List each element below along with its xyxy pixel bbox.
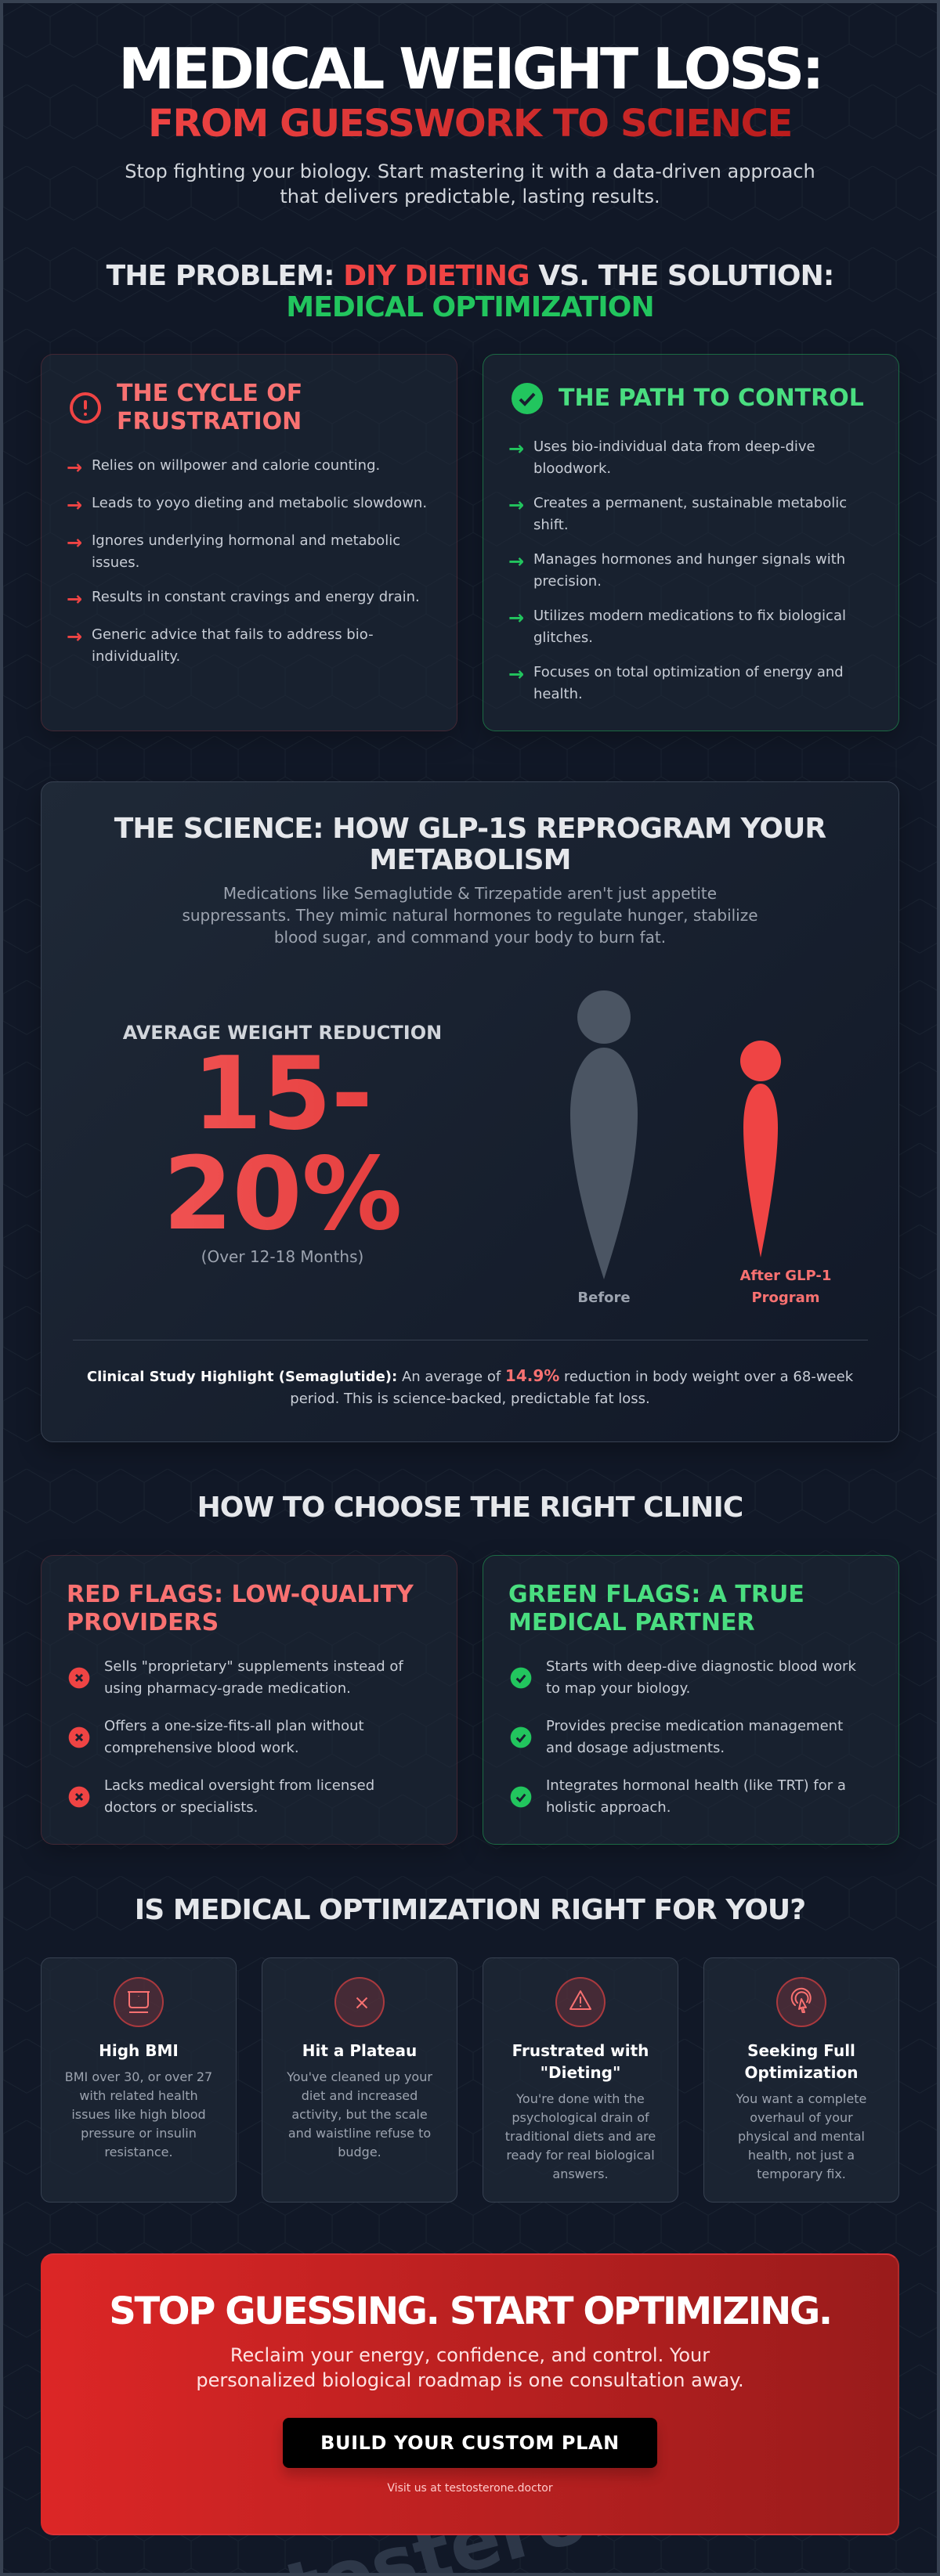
red flags list: using pharmacy-grade medication. <box>104 1680 351 1697</box>
control list: Focuses on total optimization of energy and <box>533 664 844 680</box>
control list: glitches. <box>533 630 593 646</box>
title: MEDICAL WEIGHT LOSS: <box>118 36 822 102</box>
frustration list: Leads to yoyo dieting and metabolic slowdown. <box>92 495 427 511</box>
control list <box>508 438 847 702</box>
frustration list: Results in constant cravings and energy drain. <box>92 589 420 605</box>
CTA heading: STOP GUESSING. START OPTIMIZING. <box>109 2289 831 2333</box>
control list: health. <box>533 686 583 702</box>
card title <box>745 2041 858 2082</box>
clinical study highlight: period. This is science-backed, predictable fat loss. <box>290 1391 650 1407</box>
after label: Program <box>751 1290 820 1306</box>
control list: Manages hormones and hunger signals with <box>533 551 845 568</box>
card text <box>505 2091 656 2181</box>
clinical study highlight: Clinical Study Highlight (Semaglutide): An average of 14.9% reduction in body weight over a 68-week <box>87 1366 853 1385</box>
before silhouette <box>570 990 638 1279</box>
card text: You're done with the <box>516 2091 645 2106</box>
clinical study highlight <box>87 1366 853 1407</box>
card text: overhaul of your <box>750 2110 853 2125</box>
frustration list: → <box>67 494 82 516</box>
red flags list: Sells "proprietary" supplements instead of <box>104 1658 403 1675</box>
frustration list: Ignores underlying hormonal and metabolic <box>92 532 400 549</box>
card text: temporary fix. <box>757 2167 846 2181</box>
call to action panel <box>41 2253 899 2535</box>
control list: bloodwork. <box>533 460 611 477</box>
red flags heading: RED FLAGS: LOW-QUALITY <box>67 1581 414 1608</box>
card text: resistance. <box>104 2145 173 2159</box>
science heading: METABOLISM <box>369 844 571 876</box>
heading: is it right for you: IS MEDICAL OPTIMIZATION RIGHT FOR YOU? <box>135 1894 805 1926</box>
green flags list: holistic approach. <box>546 1799 671 1816</box>
card text: health, not just a <box>748 2148 855 2163</box>
science heading <box>114 813 826 876</box>
CTA text <box>196 2344 744 2391</box>
frustration list: Generic advice that fails to address bio- <box>92 626 374 643</box>
frustration list: → <box>67 588 82 610</box>
statistic label: AVERAGE WEIGHT REDUCTION <box>123 1022 442 1044</box>
card title: Seeking Full <box>747 2041 855 2060</box>
panel: the path to control <box>483 354 899 731</box>
heading: problem vs solution: MEDICAL OPTIMIZATION <box>286 291 654 323</box>
red flags heading <box>67 1581 414 1636</box>
green flags list: and dosage adjustments. <box>546 1740 725 1756</box>
heading: problem vs solution <box>107 260 833 323</box>
panel: the cycle of frustration <box>41 354 457 731</box>
control list: Uses bio-individual data from deep-dive <box>533 438 815 455</box>
science heading: THE SCIENCE: HOW GLP-1S REPROGRAM YOUR <box>114 813 826 845</box>
card text: diet and increased <box>302 2088 418 2103</box>
red flags list <box>69 1658 404 1816</box>
CTA text: personalized biological roadmap is one consultation away. <box>196 2369 744 2391</box>
statistic value <box>163 1044 402 1245</box>
frustration list: issues. <box>92 554 139 571</box>
frustration list: → <box>67 532 82 554</box>
green flags list: Integrates hormonal health (like TRT) for a <box>546 1777 846 1794</box>
science description: Medications like Semaglutide & Tirzepatide aren't just appetite <box>223 884 717 903</box>
green flags heading: GREEN FLAGS: A TRUE <box>508 1581 804 1608</box>
tagline: that delivers predictable, lasting results. <box>280 186 660 207</box>
card text <box>65 2069 212 2159</box>
control list: → <box>508 438 524 460</box>
card text: with related health <box>79 2088 198 2103</box>
green flags heading: MEDICAL PARTNER <box>508 1609 755 1636</box>
statistic value: 15- <box>193 1036 372 1153</box>
control list: → <box>508 607 524 629</box>
card text: activity, but the scale <box>291 2107 428 2122</box>
card text <box>287 2069 432 2159</box>
science description: suppressants. They mimic natural hormones to regulate hunger, stabilize <box>182 906 758 925</box>
panel heading: THE CYCLE OF <box>117 380 302 407</box>
card text: and waistline refuse to <box>288 2126 431 2141</box>
card text: traditional diets and are <box>505 2129 656 2144</box>
control list: shift. <box>533 517 569 533</box>
green flags heading <box>508 1581 804 1636</box>
heading: problem vs solution: THE PROBLEM: DIY DIETING VS. THE SOLUTION: <box>107 260 833 292</box>
red flags heading: PROVIDERS <box>67 1609 219 1636</box>
after label: After GLP-1 <box>740 1268 831 1284</box>
card title: "Dieting" <box>540 2063 620 2082</box>
panel heading: THE PATH TO CONTROL <box>559 384 864 412</box>
red flags list: doctors or specialists. <box>104 1799 258 1816</box>
card title: High BMI <box>99 2041 179 2060</box>
green flags list <box>511 1658 856 1816</box>
website link: Visit us at testosterone.doctor <box>387 2482 553 2495</box>
icon: cross <box>334 1977 385 2027</box>
icon: warning triangle <box>555 1977 606 2027</box>
card text: issues like high blood <box>71 2107 206 2122</box>
panel: the science of GLP-1s <box>41 781 899 1442</box>
heading: choose clinic: HOW TO CHOOSE THE RIGHT CLINIC <box>197 1492 743 1524</box>
panel heading: FRUSTRATION <box>117 408 302 435</box>
panel: green flags <box>483 1555 899 1845</box>
before label: Before <box>577 1290 631 1306</box>
card: hit a plateau <box>262 1957 457 2203</box>
green flags list: Provides precise medication management <box>546 1718 843 1734</box>
frustration list: Relies on willpower and calorie counting. <box>92 457 380 474</box>
icon: cursor target <box>776 1977 826 2027</box>
frustration list: → <box>67 626 82 648</box>
control list: → <box>508 494 524 516</box>
card text <box>736 2091 866 2181</box>
red flags list: Offers a one-size-fits-all plan without <box>104 1718 364 1734</box>
card text: You've cleaned up your <box>287 2069 432 2084</box>
card text: answers. <box>552 2167 609 2181</box>
card text: BMI over 30, or over 27 <box>65 2069 212 2084</box>
card text: You want a complete <box>736 2091 866 2106</box>
statistic note: (Over 12-18 Months) <box>201 1247 363 1266</box>
card: frustrated with dieting <box>483 1957 678 2203</box>
frustration list <box>67 456 427 665</box>
frustration list: → <box>67 456 82 478</box>
statistic: average weight reduction <box>122 1022 442 1266</box>
figures: before and after silhouettes <box>570 990 831 1306</box>
control list: → <box>508 663 524 685</box>
panel: red flags <box>41 1555 457 1845</box>
science description <box>182 884 758 947</box>
card: seeking full optimization <box>703 1957 899 2203</box>
card: high BMI <box>41 1957 237 2203</box>
card text: budge. <box>338 2145 381 2159</box>
red flags list: comprehensive blood work. <box>104 1740 299 1756</box>
card title: Frustrated with <box>512 2041 649 2060</box>
control list: Creates a permanent, sustainable metabolic <box>533 495 847 511</box>
tagline: Stop fighting your biology. Start mastering it with a data-driven approach <box>125 161 815 182</box>
green flags list: to map your biology. <box>546 1680 690 1697</box>
red flags list: Lacks medical oversight from licensed <box>104 1777 374 1794</box>
CTA button: BUILD YOUR CUSTOM PLAN <box>320 2432 620 2454</box>
after silhouette <box>740 1041 781 1257</box>
card text: physical and mental <box>738 2129 865 2144</box>
tagline <box>125 161 815 207</box>
card text: pressure or insulin <box>81 2126 197 2141</box>
subtitle: FROM GUESSWORK TO SCIENCE <box>148 102 792 146</box>
icon: scale <box>114 1977 164 2027</box>
CTA button <box>283 2418 657 2468</box>
control list: precision. <box>533 573 602 590</box>
frustration list: individuality. <box>92 648 180 665</box>
control list: Utilizes modern medications to fix biological <box>533 608 846 624</box>
control list: → <box>508 550 524 572</box>
card title <box>512 2041 649 2082</box>
green flags list: Starts with deep-dive diagnostic blood work <box>546 1658 856 1675</box>
card title: Hit a Plateau <box>302 2041 417 2060</box>
card title: Optimization <box>745 2063 858 2082</box>
card text: ready for real biological <box>506 2148 655 2163</box>
card text: psychological drain of <box>512 2110 649 2125</box>
panel heading <box>70 380 302 435</box>
statistic value: 20% <box>163 1136 402 1253</box>
science description: blood sugar, and command your body to burn fat. <box>274 928 666 947</box>
CTA text: Reclaim your energy, confidence, and control. Your <box>230 2344 710 2366</box>
